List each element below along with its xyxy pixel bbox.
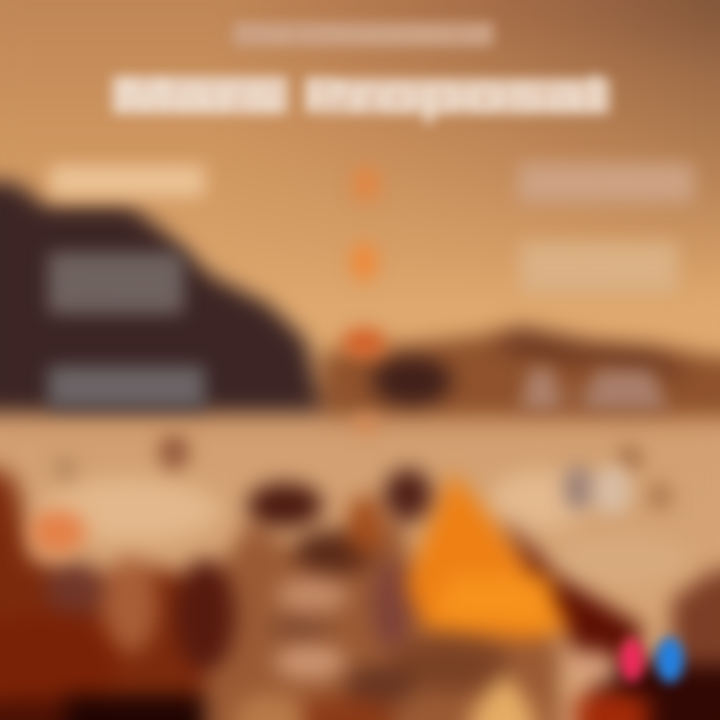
title <box>112 67 610 123</box>
hill ridge <box>490 326 695 376</box>
panel: dark left lower box <box>48 366 205 408</box>
centre light patches <box>236 577 510 720</box>
panel: dark left upper box: Life Support <box>56 271 176 293</box>
bottom light peak <box>465 672 540 720</box>
left details <box>0 557 235 720</box>
scattered small rocks <box>53 434 673 511</box>
centre foreground mass <box>205 520 560 720</box>
right brown rock <box>672 565 720 665</box>
subtitle <box>232 22 494 47</box>
ground highlights <box>40 470 690 585</box>
left foreground mass <box>0 462 250 720</box>
panel: middle right text <box>520 242 678 294</box>
panel: top left heading: Mission Goals <box>57 170 197 192</box>
ground <box>0 410 720 720</box>
panel: dark left lower box: Resources <box>56 376 196 398</box>
centre dark lobes <box>247 469 432 650</box>
dark boulder <box>372 356 452 406</box>
panel: top right text: Launch Window <box>525 173 686 195</box>
panel: top left heading <box>50 165 205 197</box>
light rock <box>566 650 618 686</box>
right hills <box>322 326 720 416</box>
bottom right dark <box>590 640 720 720</box>
sky <box>0 0 720 420</box>
panel: middle right text: Crew Habitat <box>529 257 670 279</box>
logo badge <box>620 637 684 683</box>
panel: dark left upper box <box>48 252 184 314</box>
subtitle: The Chronicles of <box>238 22 489 47</box>
panel: right lower faded text <box>520 368 668 410</box>
panel: top right text <box>518 163 694 203</box>
dark slope beside peak <box>500 515 645 665</box>
title: Mars Proposal <box>115 67 605 123</box>
red rock <box>572 692 652 720</box>
large orange peak <box>405 472 572 640</box>
panel: right lower faded text: Rovers <box>532 382 652 402</box>
orange left highlight <box>30 510 86 554</box>
timeline markers <box>342 166 386 435</box>
left rock formation <box>0 180 322 412</box>
right ground rocks: mauve and pale <box>563 465 632 515</box>
